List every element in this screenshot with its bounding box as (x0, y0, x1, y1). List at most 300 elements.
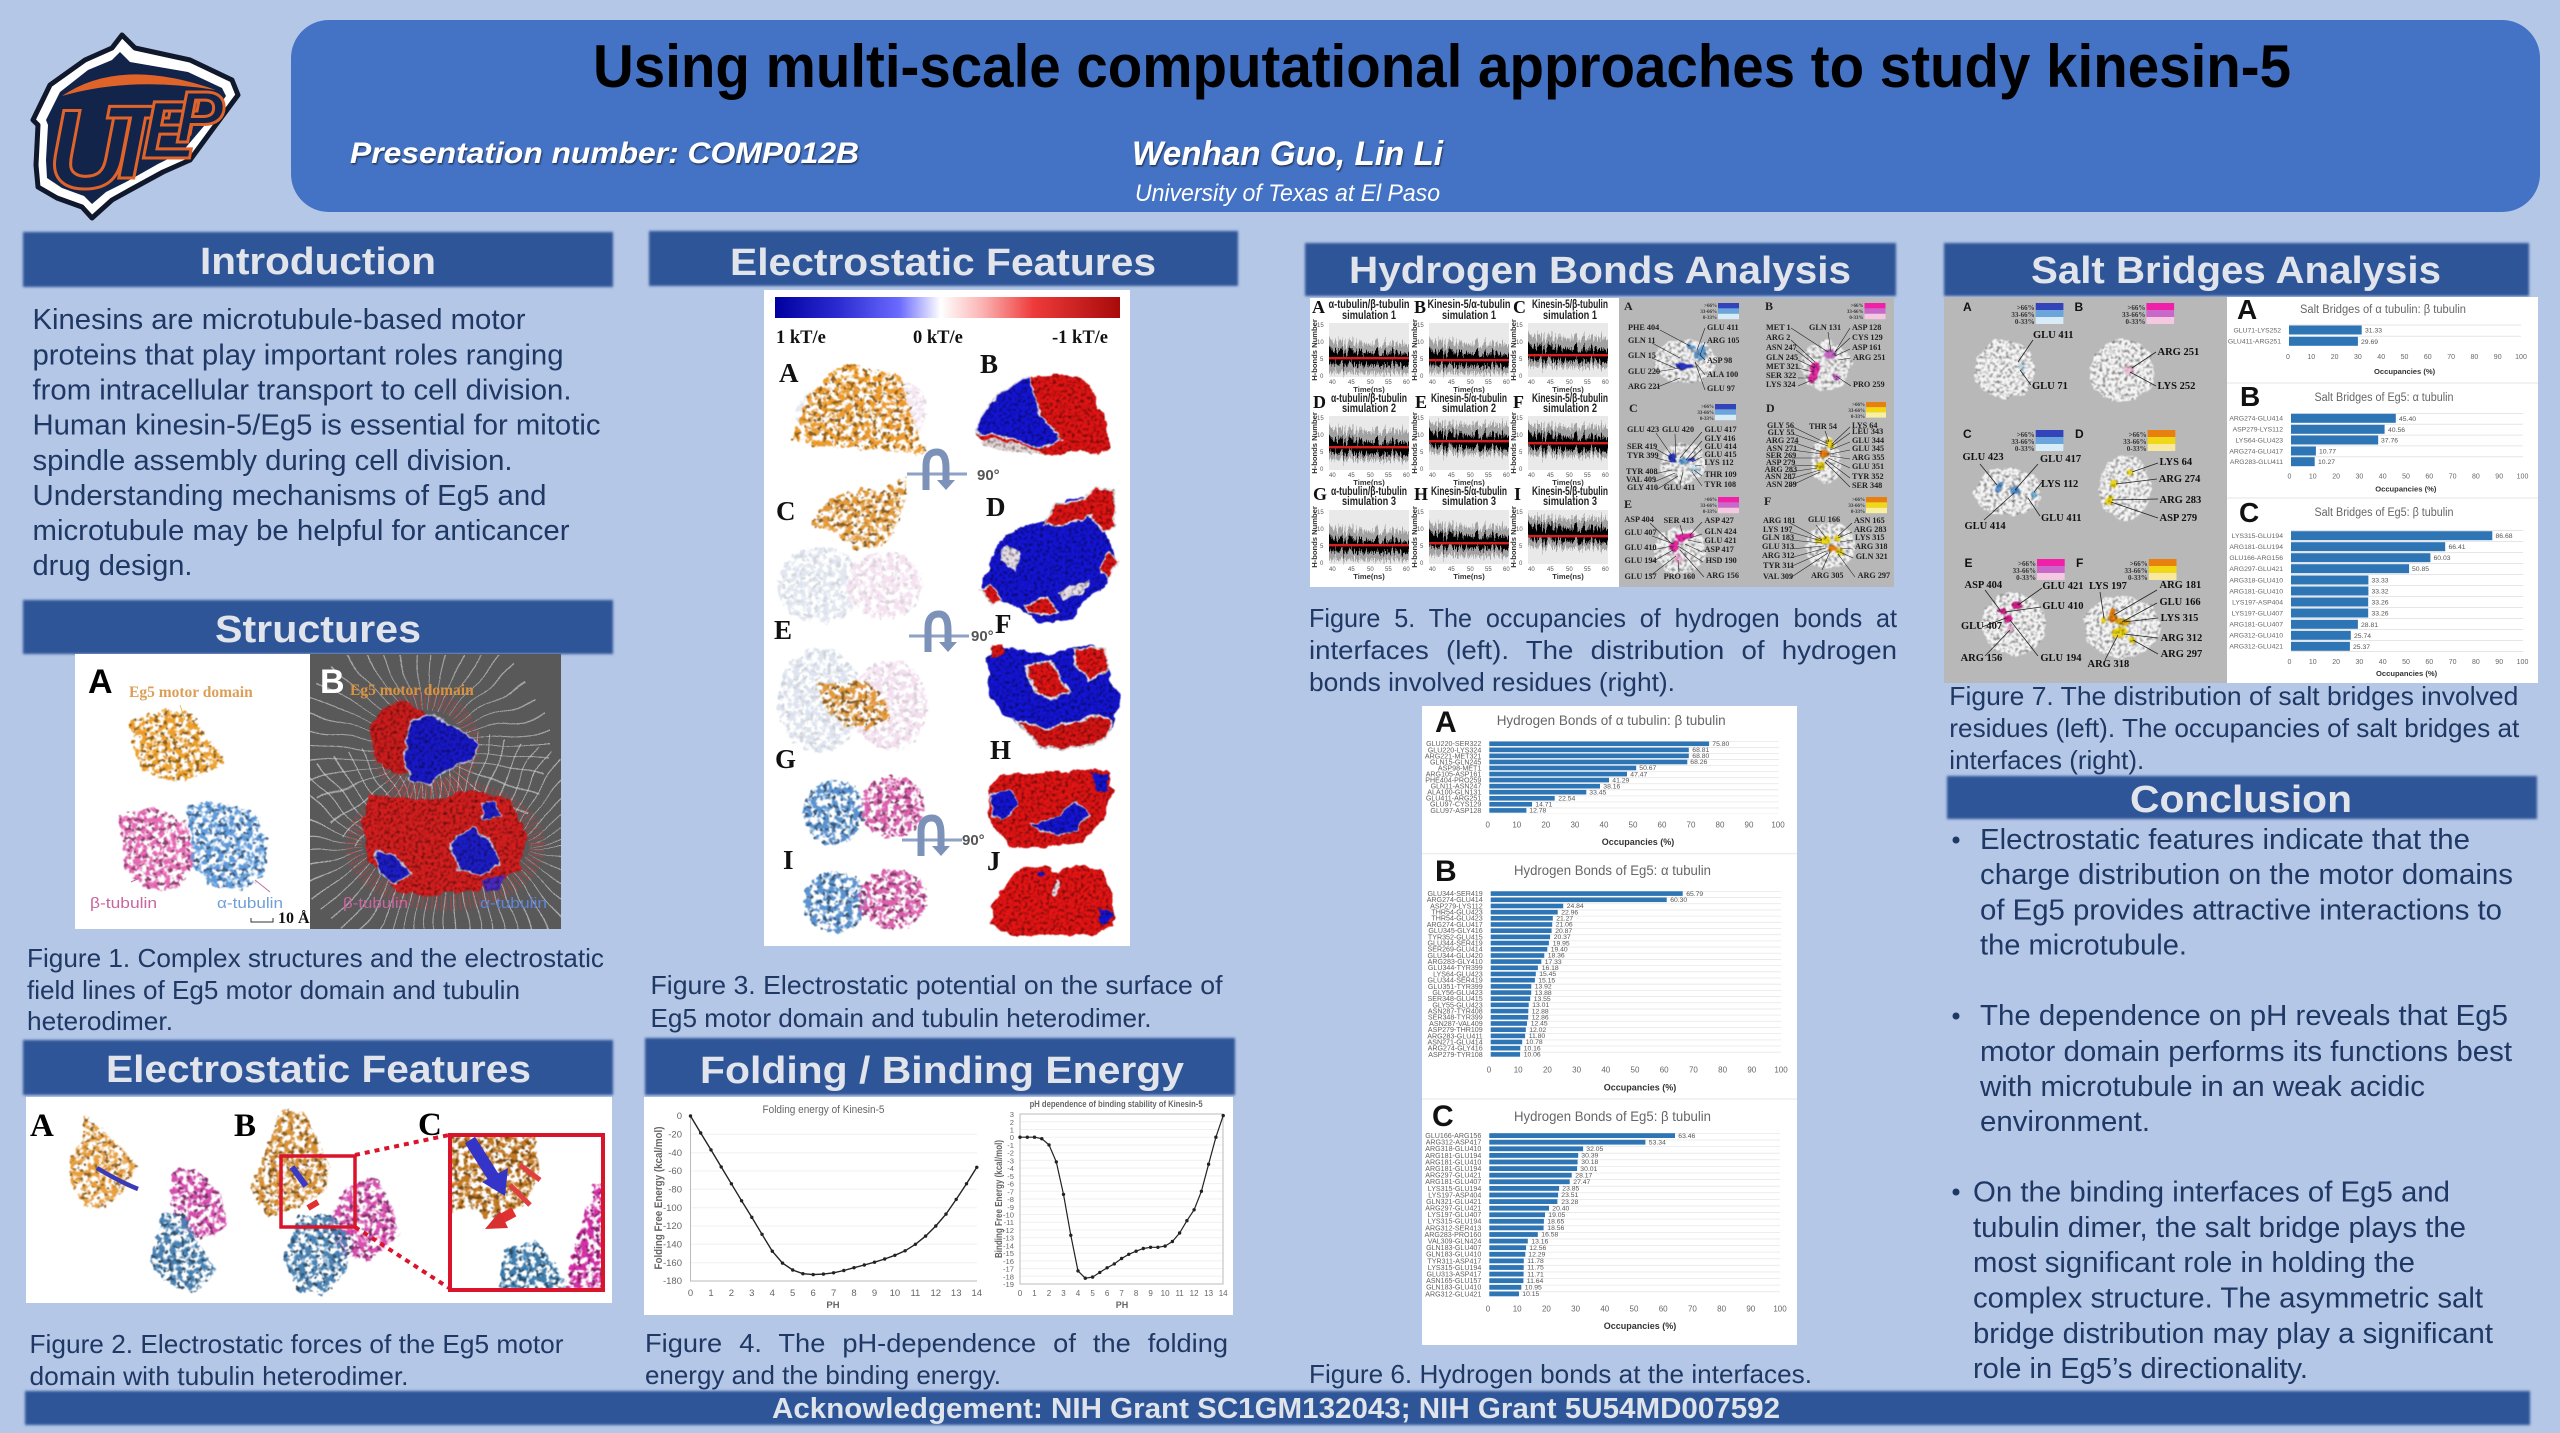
chart: binding energy vs pH: -13 (1003, 1234, 1014, 1243)
heading: Structures (23, 600, 613, 654)
caption: figure 4: energy and the binding energy. (645, 1360, 1001, 1390)
chart G (1310, 486, 1410, 581)
residues F: ASN 165 (1854, 516, 1885, 525)
chart: folding energy: 0 (688, 1288, 693, 1299)
residues C: GLU 415 (1704, 450, 1737, 459)
bar chart: Eg5 vs beta tubulin: ARG181-GLU407 (1425, 1178, 1481, 1186)
bar chart: Eg5 vs alpha tubulin: 20.87 (1555, 928, 1572, 935)
chart: folding energy: 6 (811, 1288, 816, 1299)
chart D: 40 (1329, 473, 1336, 479)
caption: figure 4 (645, 1328, 1228, 1390)
chart D: H-bonds Number (1310, 412, 1319, 474)
bar chart: salt bridges Eg5 vs beta: 90 (2495, 659, 2503, 666)
chart E (1410, 393, 1510, 487)
color scale (775, 297, 1120, 348)
chart E: simulation 2 (1442, 403, 1496, 415)
bar chart: Eg5 vs alpha tubulin: 60 (1660, 1066, 1669, 1074)
bar chart: Eg5 vs beta tubulin: Occupancies (%) (1604, 1321, 1676, 1331)
bar chart: Eg5 vs alpha tubulin: ASN287-VAL409 (1429, 1020, 1483, 1028)
chart: folding energy: 0 (677, 1111, 682, 1122)
chart H: simulation 3 (1442, 496, 1496, 508)
bar chart: alpha vs beta tubulin: GLU97-ASP128 (1430, 807, 1481, 815)
residues C: SER 419 (1627, 442, 1657, 451)
residues F: ARG 318 (1855, 542, 1888, 551)
bar chart: Eg5 vs alpha tubulin: THR54-GLU423 (1431, 909, 1483, 917)
caption: figure 5: bonds involved residues (right). (1309, 667, 1675, 697)
bar chart: Eg5 vs beta tubulin: 53.34 (1649, 1139, 1666, 1146)
panel: figure 5 right residue maps (1619, 298, 1894, 587)
bar chart: Eg5 vs alpha tubulin: 60.30 (1670, 897, 1687, 904)
bar chart: Eg5 vs alpha tubulin: 10.78 (1526, 1039, 1543, 1046)
panel: figure 7 salt bridge charts (2227, 294, 2538, 683)
panel: title banner (291, 20, 2540, 212)
ribbon G (803, 776, 925, 844)
chart: binding energy vs pH: -8 (1007, 1195, 1014, 1204)
caption: figure 7: Figure 7. The distribution of salt bridges involved (1949, 681, 2518, 711)
residues C: GLY 416 (1704, 434, 1736, 443)
figure 1 B: electrostatic field lines: β-tubulin (343, 895, 408, 912)
text block: conclusion bullet 3: bridge distribution may play a significant (1973, 1318, 2493, 1350)
panel letters: I (1514, 484, 1521, 504)
bar chart: salt bridges Eg5 vs beta: 0 (2288, 659, 2292, 666)
chart: binding energy vs pH: -6 (1007, 1180, 1014, 1189)
salt residues C: C (1963, 427, 1972, 441)
residues E: GLU 407 (1624, 528, 1657, 537)
residues E: ASP 404 (1624, 515, 1654, 524)
chart A: 55 (1385, 380, 1392, 386)
residues A: 33-66% (1700, 310, 1717, 315)
bar chart: salt bridges alpha vs beta: 40 (2377, 354, 2385, 361)
bar chart: alpha vs beta tubulin: GLN11-ASN247 (1431, 783, 1481, 791)
chart D: 60 (1403, 473, 1410, 479)
figure 2 A: separated proteins (30, 1108, 226, 1290)
caption: figure 3: Figure 3. Electrostatic potential on the surface of (650, 970, 1223, 1000)
chart D: 15 (1317, 416, 1324, 422)
chart D: 0 (1320, 467, 1324, 473)
residues E: GLU 157 (1624, 572, 1657, 581)
icon: rotation arrow 1 (907, 452, 967, 490)
salt residues D (2075, 427, 2201, 524)
bar chart: salt bridges Eg5 vs beta: ARG318-GLU410 (2229, 577, 2283, 584)
residues B: MET 1 (1766, 323, 1791, 332)
residues F (1762, 494, 1890, 581)
panel letters: H (1414, 484, 1428, 504)
heading: Hydrogen Bonds Analysis: Hydrogen Bonds Analysis (1349, 250, 1851, 292)
bar chart: Eg5 vs alpha tubulin: GLU344-SER419 (1427, 939, 1483, 947)
salt residues F: GLU 166 (2160, 597, 2201, 608)
chart D: α-tubulin/β-tubulin (1331, 393, 1407, 405)
caption: figure 7 (1949, 681, 2520, 775)
residues F: TYR 311 (1763, 561, 1794, 570)
residues F: LYS 197 (1763, 525, 1793, 534)
figure 1 A: ribbon structures: β-tubulin (90, 895, 157, 912)
panel letters: B (980, 349, 998, 379)
panel letters: B (1414, 297, 1426, 317)
bar chart: salt bridges Eg5 vs alpha: B (2240, 381, 2260, 412)
salt residues A: GLU 411 (2033, 330, 2074, 341)
chart: binding energy vs pH: Binding Free Energy (kcal/mol) (994, 1140, 1005, 1258)
bar chart: alpha vs beta tubulin: 14.71 (1535, 801, 1553, 808)
text block: conclusion bullet 2 (1952, 1000, 2512, 1138)
residues D: ASN 289 (1766, 480, 1797, 489)
salt residues E: 0-33% (2016, 574, 2036, 582)
chart D: 45 (1348, 473, 1355, 479)
heading: Introduction: Introduction (200, 241, 436, 283)
chart I: 55 (1584, 567, 1591, 573)
chart G: 50 (1367, 567, 1374, 573)
salt residues C: GLU 411 (2041, 513, 2082, 524)
bar chart: salt bridges Eg5 vs beta: 66.41 (2448, 544, 2466, 551)
chart: folding energy: -80 (668, 1184, 682, 1196)
bar chart: Eg5 vs beta tubulin: 40 (1600, 1304, 1610, 1314)
chart F (1509, 393, 1609, 487)
residues E: SER 413 (1664, 516, 1694, 525)
residues F: 33-66% (1848, 504, 1865, 509)
bar chart: Eg5 vs beta tubulin: 60 (1659, 1304, 1668, 1314)
residues C: >66% (1701, 405, 1714, 410)
bar chart: salt bridges Eg5 vs beta: Occupancies (%) (2376, 669, 2438, 678)
residues C: 0-33% (1700, 417, 1714, 422)
bar chart: salt bridges alpha vs beta: 50 (2401, 354, 2408, 361)
residues B: >66% (1851, 304, 1864, 309)
heading: Hydrogen Bonds Analysis (1305, 243, 1896, 296)
bar chart: Eg5 vs beta tubulin: GLN183-GLU410 (1426, 1284, 1481, 1292)
bar chart: Eg5 vs alpha tubulin: 13.92 (1535, 984, 1552, 991)
salt residues F: 0-33% (2128, 574, 2148, 582)
bar chart: salt bridges Eg5 vs alpha: 10.27 (2318, 459, 2335, 466)
bar chart: Eg5 vs beta tubulin: 90 (1746, 1304, 1756, 1314)
chart: binding energy vs pH: 12 (1190, 1289, 1199, 1298)
bar chart: Eg5 vs beta tubulin: ARG318-GLU410 (1425, 1145, 1481, 1153)
bar chart: Eg5 vs alpha tubulin: 13.55 (1534, 996, 1551, 1003)
residues E (1624, 497, 1739, 581)
chart: folding energy: -100 (663, 1203, 682, 1214)
heading: Electrostatic Features center: Electrostatic Features (730, 242, 1156, 284)
bar chart: alpha vs beta tubulin: 50 (1629, 820, 1638, 830)
chart F: 55 (1584, 473, 1591, 479)
chart C: Kinesin-5/β-tubulin (1532, 299, 1608, 311)
surface H (988, 770, 1112, 848)
bar chart: alpha vs beta tubulin: Hydrogen Bonds of α tubulin: β tubulin (1497, 712, 1726, 728)
residues B: ASN 247 (1766, 343, 1797, 352)
residues E: 0-33% (1703, 510, 1717, 515)
chart I: 0 (1519, 561, 1523, 567)
panel letters (1312, 297, 1526, 504)
salt residues B: LYS 252 (2158, 381, 2195, 392)
surface J (990, 865, 1113, 935)
residues D: ASN 287 (1765, 472, 1796, 481)
bar chart: alpha vs beta tubulin: 38.16 (1603, 783, 1621, 790)
residues B: GLN 245 (1766, 353, 1798, 362)
text block: conclusion bullet 3: On the binding interfaces of Eg5 and (1973, 1176, 2450, 1208)
residues B (1765, 299, 1886, 390)
salt residues B (2074, 300, 2199, 402)
bar chart: Eg5 vs alpha tubulin: 12.02 (1529, 1027, 1546, 1034)
chart: binding energy vs pH: -1 (1007, 1141, 1014, 1150)
heading: Folding / Binding Energy: Folding / Binding Energy (700, 1050, 1184, 1092)
bar chart: Eg5 vs beta tubulin: GLN321-GLU421 (1426, 1198, 1481, 1206)
residues F: 0-33% (1851, 510, 1865, 515)
bar chart: alpha vs beta tubulin: 100 (1771, 820, 1785, 830)
caption: figure 6: Figure 6. Hydrogen bonds at the interfaces. (1309, 1359, 1812, 1389)
residues A: GLU 220 (1628, 367, 1660, 376)
authors: Wenhan Guo, Lin Li (1132, 135, 1445, 173)
bar chart: alpha vs beta tubulin: ALA100-GLN131 (1427, 789, 1481, 797)
residues B: ASP 128 (1852, 323, 1881, 332)
residues F: GLU 166 (1808, 515, 1840, 524)
salt residues C: GLU 423 (1962, 452, 2004, 463)
panel: figure 3 electrostatic potential (764, 290, 1130, 946)
residues A: 0-33% (1703, 316, 1717, 321)
bar chart: Eg5 vs beta tubulin: LYS315-GLU194 (1428, 1264, 1481, 1272)
salt residues E: GLU 410 (2042, 601, 2084, 612)
salt residues E: >66% (2018, 560, 2036, 568)
chart: folding energy: 9 (872, 1288, 877, 1299)
icon: rotation arrow 2 (909, 614, 969, 652)
bar chart: salt bridges Eg5 vs beta: 30 (2356, 659, 2363, 666)
bar chart: salt bridges Eg5 vs beta: LYS315-GLU194 (2232, 533, 2283, 540)
chart D: Time(ns) (1353, 478, 1385, 487)
chart: folding energy: 13 (951, 1288, 961, 1299)
chart I: 5 (1519, 544, 1523, 550)
figure 1 B: electrostatic field lines: α-tubulin (480, 895, 547, 912)
bar chart: Eg5 vs alpha tubulin: GLU344-GLU420 (1427, 952, 1483, 960)
bar chart: alpha vs beta tubulin: 20 (1541, 820, 1551, 830)
bar chart: Eg5 vs alpha tubulin: 19.40 (1551, 946, 1568, 953)
salt residues C: GLU 414 (1964, 521, 2006, 532)
chart B: 15 (1417, 323, 1424, 329)
chart G: Time(ns) (1353, 572, 1385, 581)
bar chart: alpha vs beta tubulin: Occupancies (%) (1602, 837, 1674, 847)
residues C: TYR 108 (1704, 480, 1736, 489)
residues D (1765, 401, 1886, 490)
chart: binding energy vs pH: 13 (1204, 1289, 1214, 1298)
chart: binding energy vs pH: 4 (1076, 1289, 1081, 1298)
panel: figure 2 electrostatic forces (26, 1097, 612, 1303)
bar chart: Eg5 vs alpha tubulin: ASP279-TYR108 (1428, 1051, 1483, 1059)
residues C: VAL 409 (1626, 475, 1656, 484)
residues C: THR 109 (1704, 470, 1737, 479)
bar chart: salt bridges Eg5 vs alpha: 30 (2356, 474, 2363, 481)
residues C: TYR 399 (1627, 451, 1659, 460)
figure 2 C: enlarged inset: C (418, 1107, 442, 1143)
residues C (1626, 401, 1737, 492)
caption: figure 1: Figure 1. Complex structures and the electrostatic (27, 943, 604, 973)
bar chart: Eg5 vs alpha tubulin: 50 (1631, 1066, 1640, 1074)
salt residues F: LYS 197 (2089, 581, 2127, 592)
residues F: GLN 321 (1856, 552, 1888, 561)
chart H: 45 (1448, 567, 1455, 573)
salt residues D: 33-66% (2123, 438, 2147, 446)
bar chart: Eg5 vs beta tubulin: VAL309-GLN424 (1428, 1237, 1481, 1245)
bar chart: Eg5 vs beta tubulin: 63.46 (1678, 1133, 1696, 1140)
bar chart: Eg5 vs beta tubulin: 18.56 (1547, 1225, 1565, 1232)
surface F (987, 645, 1120, 748)
panel letters: J (987, 846, 1000, 876)
residues D: ARG 283 (1765, 465, 1797, 474)
chart: folding energy: 1 (708, 1288, 714, 1299)
chart D (1310, 393, 1410, 487)
panel: figure 5 left time series (1310, 297, 1619, 587)
chart E: 40 (1429, 473, 1436, 479)
figure 2 A: separated proteins: A (30, 1108, 54, 1144)
chart: binding energy vs pH: 5 (1090, 1289, 1095, 1298)
residues B: PRO 259 (1853, 380, 1885, 389)
residues E: GLU 410 (1624, 543, 1657, 552)
text block: conclusion bullet 1: of Eg5 provides attractive interactions to (1980, 895, 2502, 927)
chart E: 15 (1417, 416, 1424, 422)
bar chart: salt bridges Eg5 vs beta: 33.26 (2372, 610, 2389, 618)
bar chart: alpha vs beta tubulin: ASP98-MET1 (1438, 764, 1481, 772)
residues A: GLN 11 (1628, 336, 1656, 345)
chart E: H-bonds Number (1410, 412, 1419, 474)
chart: binding energy vs pH: -2 (1007, 1149, 1014, 1158)
chart E: 55 (1485, 473, 1492, 479)
bar chart: salt bridges Eg5 vs beta: 60.03 (2434, 555, 2451, 562)
chart B: 40 (1429, 380, 1436, 386)
bar chart: alpha vs beta tubulin: 22.54 (1558, 795, 1576, 802)
residues F: ARG 181 (1763, 516, 1796, 525)
bar chart: salt bridges Eg5 vs alpha: Occupancies (%) (2375, 485, 2437, 494)
chart: folding energy: -180 (663, 1276, 682, 1287)
bar chart: Eg5 vs alpha tubulin: 90 (1747, 1066, 1757, 1074)
chart A: 10 (1317, 340, 1324, 346)
residues C: GLY 410 (1627, 483, 1658, 492)
bar chart: Eg5 vs beta tubulin: Hydrogen Bonds of Eg5: β tubulin (1514, 1108, 1711, 1124)
bar chart: salt bridges Eg5 vs alpha: 50 (2402, 474, 2410, 481)
caption: figure 5: interfaces (left). The distribution of hydrogen (1309, 635, 1897, 665)
bar chart: Eg5 vs alpha tubulin: 100 (1774, 1066, 1788, 1074)
bar chart: Eg5 vs alpha tubulin: 80 (1718, 1066, 1728, 1074)
bar chart: Eg5 vs beta tubulin: 10.15 (1522, 1291, 1540, 1298)
chart G: 15 (1317, 510, 1324, 516)
caption: figure 7: interfaces (right). (1949, 745, 2144, 775)
chart F: 50 (1566, 473, 1573, 479)
caption: figure 7: residues (left). The occupancies of salt bridges at (1949, 713, 2520, 743)
bar chart: salt bridges alpha vs beta: 90 (2494, 354, 2502, 361)
affiliation: University of Texas at El Paso (1135, 180, 1440, 207)
chart F: 45 (1547, 473, 1554, 479)
chart: binding energy vs pH: -12 (1003, 1226, 1014, 1235)
chart E: 45 (1448, 473, 1455, 479)
figure 1 A: ribbon structures (88, 663, 310, 927)
figure 1 A: ribbon structures: A (88, 663, 113, 701)
bar chart: Eg5 vs beta tubulin: 20.40 (1552, 1205, 1570, 1212)
chart: binding energy vs pH: 11 (1175, 1289, 1184, 1298)
bar chart: alpha vs beta tubulin: ARG221-MET321 (1425, 752, 1481, 760)
figure 2 B: force arrows on complex (234, 1108, 449, 1292)
bar chart: Eg5 vs alpha tubulin: 12.88 (1532, 1008, 1549, 1015)
residues F: >66% (1852, 498, 1865, 503)
panel letters: H (990, 735, 1011, 765)
bar chart: salt bridges alpha vs beta: Salt Bridges of α tubulin: β tubulin (2300, 304, 2466, 316)
chart D: 55 (1385, 473, 1392, 479)
ribbon E (778, 648, 928, 752)
residues B: 0-33% (1849, 316, 1864, 321)
salt residues D: LYS 64 (2160, 457, 2193, 468)
chart: folding energy: Folding energy of Kinesin-5 (762, 1104, 884, 1116)
bar chart: Eg5 vs beta tubulin: 32.05 (1586, 1146, 1604, 1153)
bar chart: salt bridges Eg5 vs beta: 25.37 (2353, 644, 2370, 651)
figure 1 B: electrostatic field lines: B (320, 663, 345, 701)
bar chart: salt bridges Eg5 vs beta: 70 (2449, 659, 2457, 666)
bar chart: salt bridges alpha vs beta: 30 (2354, 354, 2362, 361)
bar chart: salt bridges Eg5 vs beta: Salt Bridges of Eg5: β tubulin (2314, 507, 2454, 519)
chart G: 60 (1403, 567, 1410, 573)
bar chart: salt bridges alpha vs beta: 10 (2307, 354, 2315, 361)
chart A: α-tubulin/β-tubulin (1328, 299, 1410, 311)
chart A: 15 (1317, 323, 1324, 329)
chart: folding energy: -40 (668, 1148, 682, 1159)
salt residues E: ASP 404 (1964, 580, 2003, 591)
residues A (1624, 299, 1740, 393)
salt residues A: A (1963, 300, 1972, 314)
residues A: ALA 100 (1707, 370, 1738, 379)
salt residues F: 33-66% (2124, 567, 2148, 575)
bar chart: alpha vs beta tubulin: GLU97-CYS129 (1430, 801, 1481, 809)
bar chart: alpha vs beta tubulin: 50.67 (1639, 765, 1657, 772)
bar chart: Eg5 vs alpha tubulin: 24.84 (1567, 903, 1584, 910)
bar chart: Eg5 vs beta tubulin: ARG181-GLU194 (1425, 1152, 1481, 1160)
residues E: E (1624, 497, 1632, 511)
chart: folding energy: 4 (770, 1288, 775, 1299)
text block: conclusion bullet 3: tubulin dimer, the salt bridge plays the (1973, 1212, 2466, 1244)
heading: Conclusion: Conclusion (2130, 779, 2352, 821)
bar chart: Eg5 vs alpha tubulin: 16.18 (1542, 965, 1559, 972)
chart B: 10 (1417, 340, 1424, 346)
acknowledgement bar (25, 1391, 2530, 1425)
chart: folding energy: 7 (831, 1288, 836, 1299)
heading: Electrostatic Features left (23, 1040, 613, 1095)
text block: conclusion bullet 2: environment. (1980, 1106, 2150, 1138)
bar chart: Eg5 vs beta tubulin: LYS315-GLU194 (1428, 1185, 1481, 1193)
chart F: H-bonds Number (1509, 412, 1518, 474)
chart I: 60 (1602, 567, 1609, 573)
panel letters: G (775, 744, 796, 774)
caption: figure 2: domain with tubulin heterodimer. (30, 1361, 409, 1391)
chart B: 60 (1503, 380, 1510, 386)
residues D: GLU 351 (1852, 462, 1884, 471)
bar chart: Eg5 vs beta tubulin: ARG312-SER413 (1425, 1224, 1481, 1232)
salt residues D: ASP 279 (2160, 513, 2197, 524)
acknowledgement bar: Acknowledgement: NIH Grant SC1GM132043; NIH Grant 5U54MD007592 (772, 1393, 1780, 1425)
residues C: LYS 112 (1704, 458, 1734, 467)
heading: Electrostatic Features center (649, 231, 1238, 286)
heading: Salt Bridges Analysis: Salt Bridges Analysis (2031, 250, 2441, 292)
bar chart: alpha vs beta tubulin: 33.45 (1589, 789, 1607, 796)
residues D: ARG 274 (1766, 436, 1799, 445)
bar chart: Eg5 vs alpha tubulin (1427, 855, 1788, 1093)
salt residues B: 33-66% (2122, 311, 2145, 319)
bar chart: alpha vs beta tubulin: 70 (1687, 820, 1696, 830)
bar chart: Eg5 vs alpha tubulin: GLY56-GLU423 (1432, 989, 1483, 997)
bar chart: Eg5 vs alpha tubulin: 10.16 (1524, 1045, 1541, 1052)
bar chart: Eg5 vs alpha tubulin: 11.80 (1529, 1033, 1545, 1040)
chart B: Kinesin-5/α-tubulin (1428, 299, 1510, 311)
bar chart: alpha vs beta tubulin: ARG105-ASP161 (1426, 770, 1481, 778)
chart A: 45 (1348, 380, 1355, 386)
chart A: 60 (1403, 380, 1410, 386)
caption: figure 2 (30, 1329, 564, 1391)
salt residues F (2076, 556, 2202, 670)
chart: binding energy vs pH: -4 (1007, 1164, 1014, 1173)
text block: conclusion bullet 2: The dependence on pH reveals that Eg5 (1980, 1000, 2508, 1032)
bar chart: salt bridges Eg5 vs beta (2229, 497, 2528, 678)
salt residues F: ARG 297 (2161, 649, 2202, 660)
residues C: GLU 420 (1662, 425, 1694, 434)
residues C: C (1629, 401, 1638, 415)
surface B (975, 375, 1110, 456)
